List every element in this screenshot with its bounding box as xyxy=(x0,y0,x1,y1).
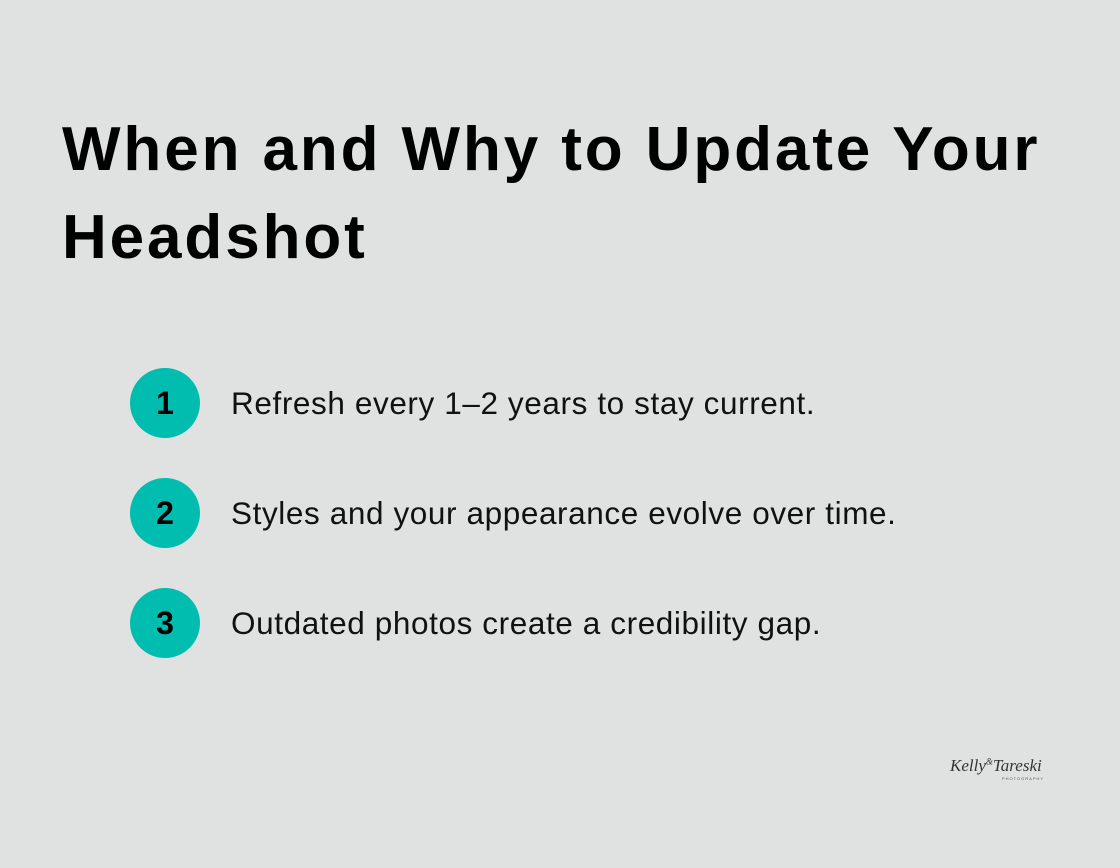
badge 2 xyxy=(130,478,200,548)
title xyxy=(62,115,1040,272)
text 3: Outdated photos create a credibility gap. xyxy=(231,605,821,641)
item 2 xyxy=(130,478,897,548)
text 2: Styles and your appearance evolve over time. xyxy=(231,495,897,531)
item 3 xyxy=(130,588,821,658)
logo signature: Kelly&Tareski xyxy=(950,756,1042,775)
title: When and Why to Update Your xyxy=(62,115,1040,184)
badge 2: 2 xyxy=(156,495,174,531)
item 1 xyxy=(130,368,815,438)
badge 3 xyxy=(130,588,200,658)
badge 1: 1 xyxy=(156,385,174,421)
logo signature: PHOTOGRAPHY xyxy=(1002,776,1044,781)
badge 3: 3 xyxy=(156,605,174,641)
text 1: Refresh every 1–2 years to stay current. xyxy=(231,385,815,421)
title: Headshot xyxy=(62,203,368,272)
badge 1 xyxy=(130,368,200,438)
